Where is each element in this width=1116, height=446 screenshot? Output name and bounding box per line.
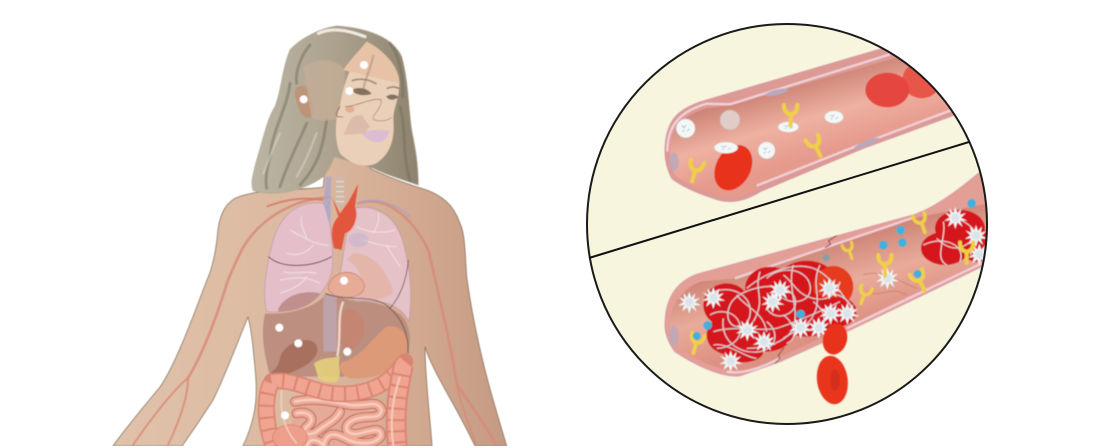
- large intestine: [266, 362, 405, 446]
- inner wall stripes: [667, 54, 952, 186]
- eye left: [352, 88, 372, 95]
- ear: [295, 86, 314, 118]
- arm arteries: [133, 197, 497, 446]
- infographic illustration: [112, 23, 988, 446]
- stomach: [340, 326, 407, 379]
- lung right of image: [336, 207, 411, 322]
- lips: [362, 130, 389, 142]
- human figure with internal organs: [113, 26, 507, 446]
- nose: [373, 100, 392, 121]
- vessels clipped to circle: [665, 43, 1013, 406]
- eye right: [386, 94, 399, 100]
- blue dots: [693, 199, 976, 340]
- lumen mottling: [863, 273, 917, 295]
- liver and gallbladder: [272, 340, 318, 375]
- divider line: [589, 142, 969, 258]
- pancreas: [314, 357, 340, 382]
- fibrin strands: [707, 265, 857, 358]
- healthy blood vessel: [664, 48, 954, 202]
- Y-shaped receptors: [686, 105, 827, 183]
- vessel wall: [664, 48, 954, 202]
- white immune cells: [676, 110, 843, 159]
- endothelial cell: [669, 326, 679, 346]
- brows: [352, 79, 400, 89]
- escaping red blood cells: [816, 323, 849, 405]
- main clot: [703, 261, 857, 362]
- antibodies: [687, 213, 973, 355]
- vessel lumen: [670, 58, 949, 192]
- hair: [252, 26, 418, 193]
- circle outline: [587, 24, 987, 424]
- white location dots: [275, 61, 368, 419]
- vessel tears: [775, 236, 837, 363]
- stomach upper: [341, 309, 364, 353]
- damaged blood vessel with clots: [665, 173, 1013, 406]
- small intestine: [292, 400, 382, 446]
- red blood cells: [707, 62, 941, 197]
- semi-transparent skull region: [303, 60, 345, 121]
- skull bones: [343, 115, 370, 135]
- circle background: [587, 24, 987, 424]
- abdomen cavity: [263, 293, 410, 377]
- endothelial cells: [669, 87, 880, 171]
- platelets: [678, 207, 991, 372]
- wall stripes: [727, 218, 982, 372]
- body silhouette: [113, 147, 507, 446]
- face: [336, 42, 400, 166]
- vessel wall: [665, 173, 1013, 376]
- distant clot: [921, 210, 993, 265]
- heart: [328, 272, 364, 297]
- trachea and great vessels: [267, 177, 410, 250]
- magnified circle panel: [587, 24, 1013, 424]
- lung left of image: [265, 203, 333, 312]
- vessel lumen: [671, 204, 986, 371]
- diaphragm line: [325, 293, 408, 353]
- aorta and esophagus: [323, 295, 343, 357]
